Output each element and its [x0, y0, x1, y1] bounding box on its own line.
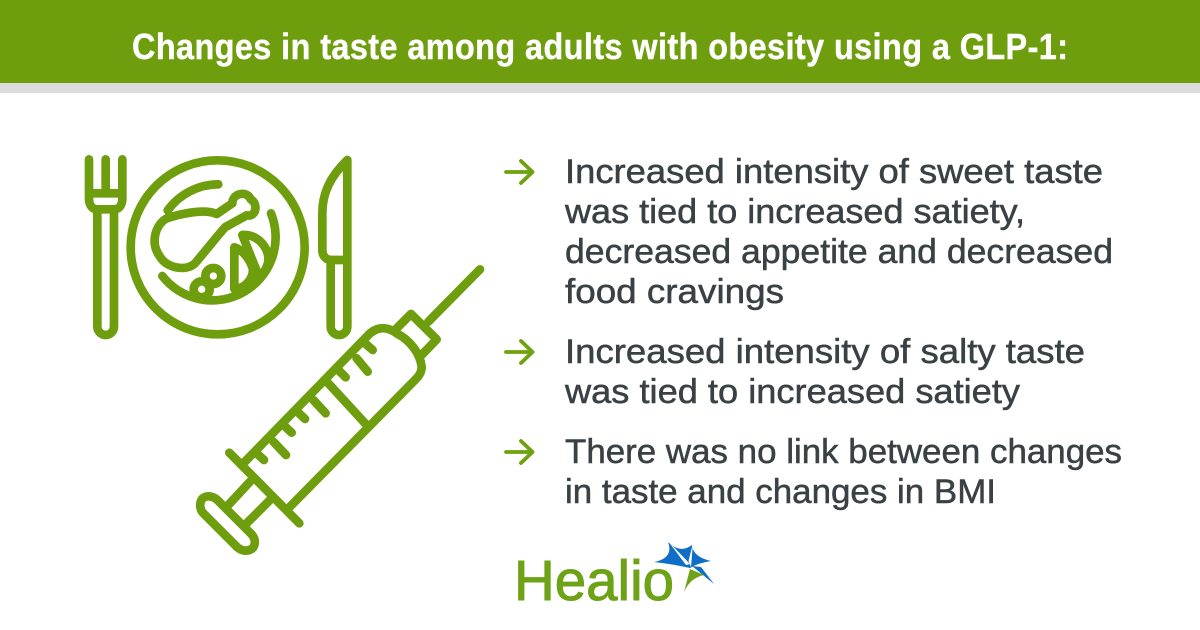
bullet: sweet taste: decreased appetite and decreased	[565, 233, 1113, 271]
arrow	[506, 441, 532, 463]
icon: peas	[194, 268, 221, 297]
icon: plate	[131, 160, 305, 334]
plunger head	[200, 496, 255, 551]
tick marks	[257, 343, 373, 460]
icon: chicken drumstick	[155, 194, 255, 268]
header banner	[0, 0, 1200, 93]
plunger rod	[228, 482, 270, 523]
arrow	[506, 161, 532, 183]
logo wordmark: Healio	[514, 549, 674, 613]
flange	[229, 453, 299, 523]
logo star	[654, 541, 714, 592]
needle hub	[397, 314, 437, 355]
logo: Healio	[514, 541, 714, 613]
title: Changes in taste among adults with obesity using a GLP-1:	[132, 27, 1068, 67]
arrow	[506, 341, 532, 363]
bullet: sweet taste: was tied to increased satiety,	[564, 193, 1025, 231]
icon: fork	[89, 159, 122, 335]
needle	[428, 269, 480, 322]
icon: knife	[322, 160, 347, 335]
bullet: BMI: in taste and changes in BMI	[565, 473, 996, 511]
bullet: salty taste	[506, 333, 1085, 411]
bullet: sweet taste	[506, 153, 1113, 311]
barrel	[243, 328, 422, 507]
bullet: salty taste: was tied to increased satiety	[564, 373, 1020, 411]
icon: plate with fork and knife	[89, 159, 347, 335]
bullet list	[506, 153, 1122, 511]
bullet: BMI	[506, 433, 1122, 511]
bullet: sweet taste: Increased intensity of sweet taste	[565, 153, 1103, 191]
piston	[328, 383, 367, 425]
icon: syringe	[200, 269, 480, 551]
icon: lemon wedges	[234, 235, 268, 289]
bullet: BMI: There was no link between changes	[565, 433, 1122, 471]
bullet: sweet taste: food cravings	[565, 273, 784, 311]
bullet: salty taste: Increased intensity of salty taste	[565, 333, 1085, 371]
